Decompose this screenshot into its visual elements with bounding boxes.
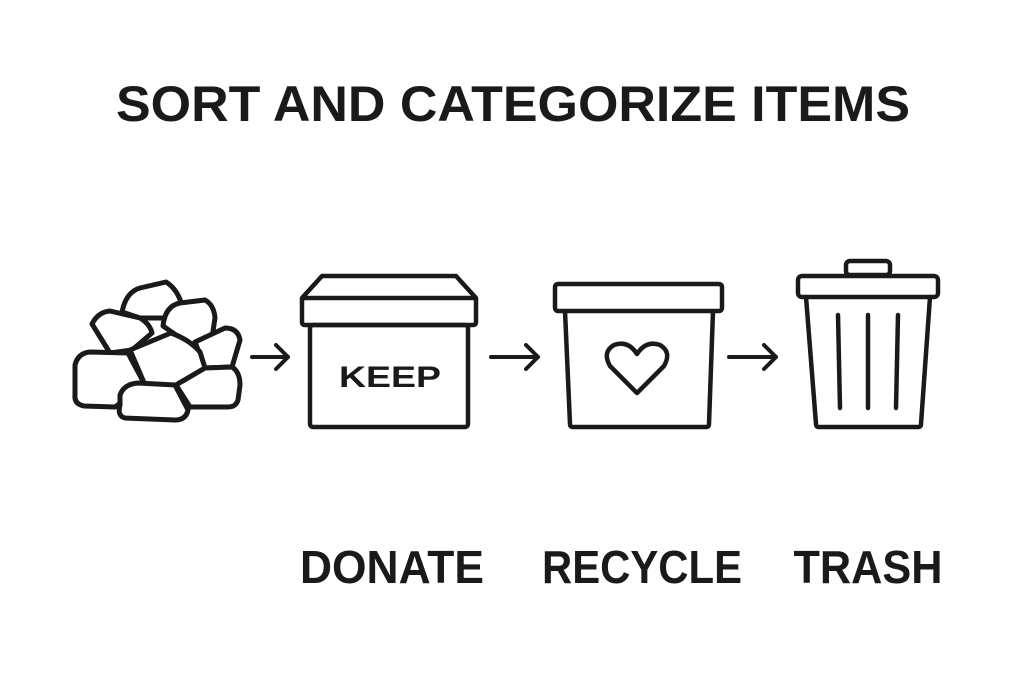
icon: keep box xyxy=(302,276,476,427)
arrow 3 xyxy=(729,345,776,369)
label: recycle: RECYCLE xyxy=(542,541,742,593)
arrow 2 xyxy=(491,345,538,369)
icon: trash can xyxy=(798,261,938,427)
title: SORT AND CATEGORIZE ITEMS xyxy=(116,76,910,132)
label: donate: DONATE xyxy=(300,541,484,593)
icon: pile of items xyxy=(75,282,240,420)
label: trash: TRASH xyxy=(794,541,942,593)
icon: recycle bin with heart xyxy=(555,284,722,427)
box label: KEEP xyxy=(339,361,441,394)
arrow 1 xyxy=(252,345,288,369)
